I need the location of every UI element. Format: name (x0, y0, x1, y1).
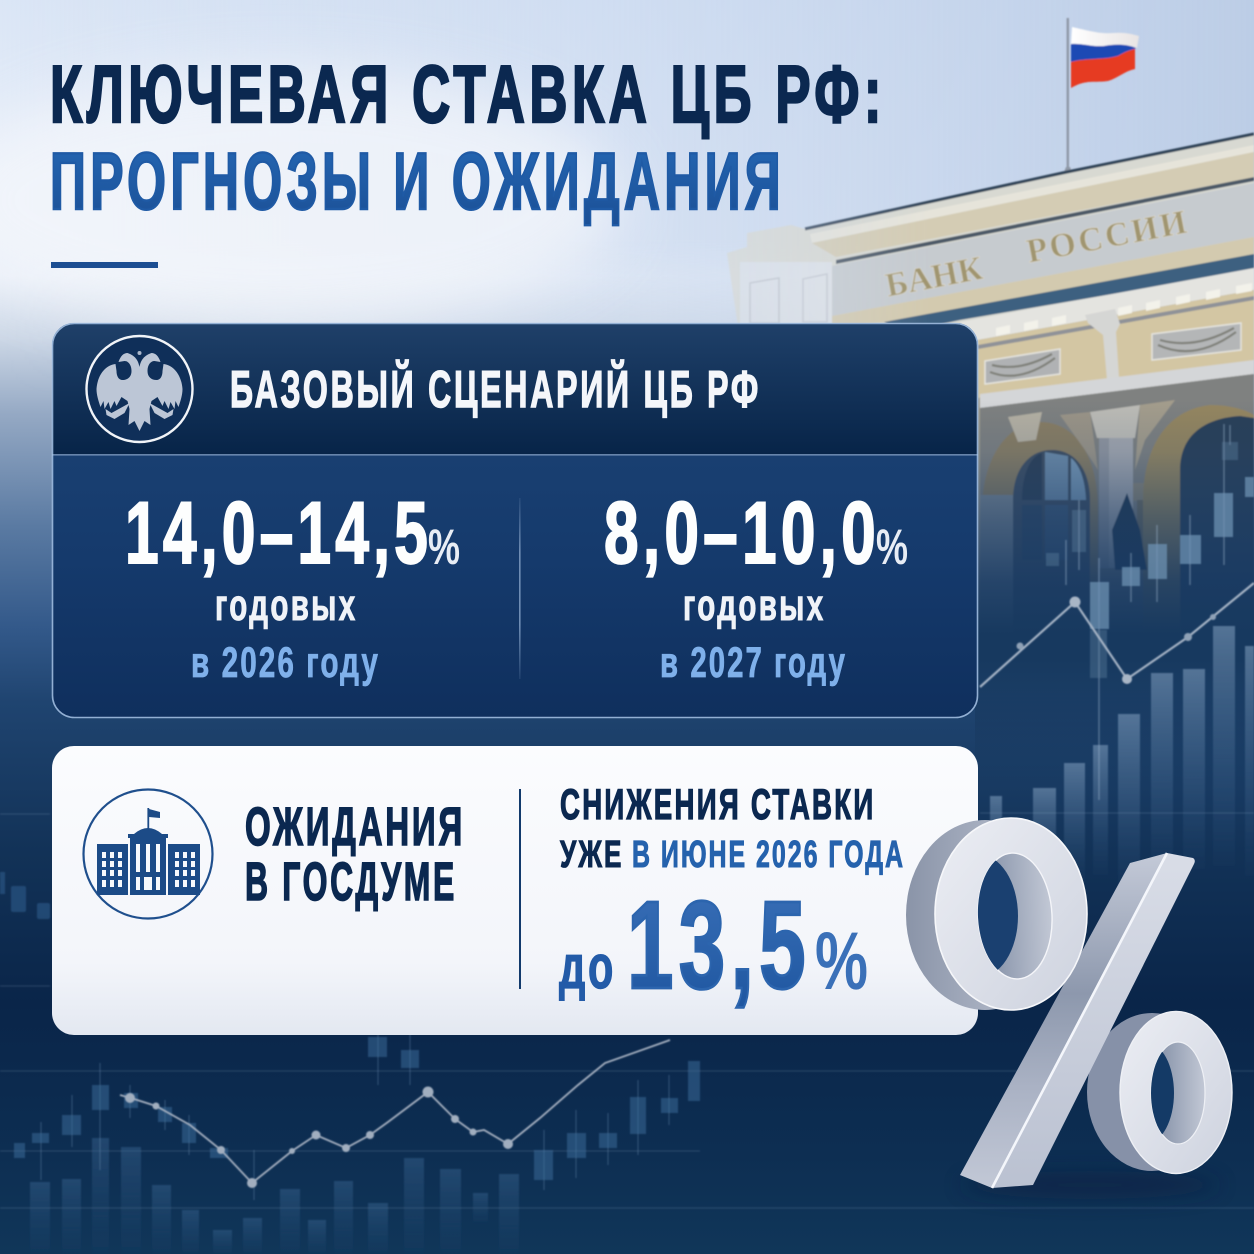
cartouche left (985, 349, 1060, 384)
icon: State Duma building (84, 790, 212, 918)
building upper facade (727, 134, 1254, 340)
upper ring (906, 818, 1087, 1010)
text: rate cut expectation: В ИЮНЕ 2026 ГОДА (632, 834, 905, 876)
heading: expectations: ОЖИДАНИЯ (245, 797, 465, 857)
slash (960, 853, 1195, 1188)
fir tree (1112, 493, 1147, 570)
text: rate cut expectation: УЖЕ (560, 834, 624, 876)
big number: 13.5 percent: % (815, 916, 868, 1007)
building middle facade (960, 268, 1254, 645)
chart: lower left background (0, 813, 1254, 1254)
cartouche right (1152, 323, 1241, 360)
text: БАНК РОССИИ: РОССИИ (1024, 204, 1190, 271)
flag pole (1064, 18, 1072, 173)
heading: expectations: В ГОСДУМЕ (245, 852, 457, 912)
title: ПРОГНОЗЫ И ОЖИДАНИЯ (50, 137, 785, 227)
forecast 2027: годовых (683, 581, 826, 630)
panel heading: БАЗОВЫЙ СЦЕНАРИЙ ЦБ РФ (230, 359, 761, 419)
line chart: right (980, 583, 1254, 687)
big number: 13.5 percent: до (559, 933, 616, 1002)
panel: base scenario (52, 323, 978, 718)
line chart: lower left (120, 1040, 670, 1188)
photo: Bank of Russia building (727, 18, 1254, 645)
lower ring (1087, 1012, 1232, 1174)
text: БАНК РОССИИ: БАНК (882, 250, 986, 305)
text: rate cut expectation (560, 781, 905, 876)
text: БАНК РОССИИ (884, 210, 1188, 297)
forecast 2026: в 2026 году (191, 639, 380, 687)
icon: double-headed eagle emblem (86, 336, 192, 442)
forecast 2026: 14,0–14,5 (125, 483, 432, 582)
chart: right background bars (990, 626, 1254, 894)
forecast 2026: % (428, 519, 460, 575)
forecast 2027: 8,0–10,0 (604, 483, 880, 582)
chart: right background candles (1046, 424, 1254, 800)
forecast 2026: годовых (215, 581, 358, 630)
icon: 3D percent sign (906, 818, 1232, 1199)
right arch (1143, 405, 1254, 640)
title (50, 50, 886, 227)
panel: expectations in the State Duma (52, 746, 978, 1035)
text: rate cut expectation: СНИЖЕНИЯ СТАВКИ (560, 781, 876, 829)
bars (30, 1138, 519, 1254)
big number: 13.5 percent: 13,5 (627, 876, 811, 1015)
heading: expectations (245, 797, 465, 912)
forecast 2027 (604, 483, 908, 687)
fade of photo to navy (975, 400, 1254, 660)
title underline (51, 262, 158, 268)
forecast 2027: в 2027 году (660, 639, 847, 687)
panel header (52, 323, 978, 456)
left arch (982, 422, 1098, 640)
panels (750, 278, 779, 323)
column (1099, 438, 1133, 568)
candles (41, 1030, 669, 1200)
icon: Russian flag (1071, 27, 1139, 88)
forecast 2027: % (876, 519, 908, 575)
forecast 2026 (125, 483, 460, 687)
